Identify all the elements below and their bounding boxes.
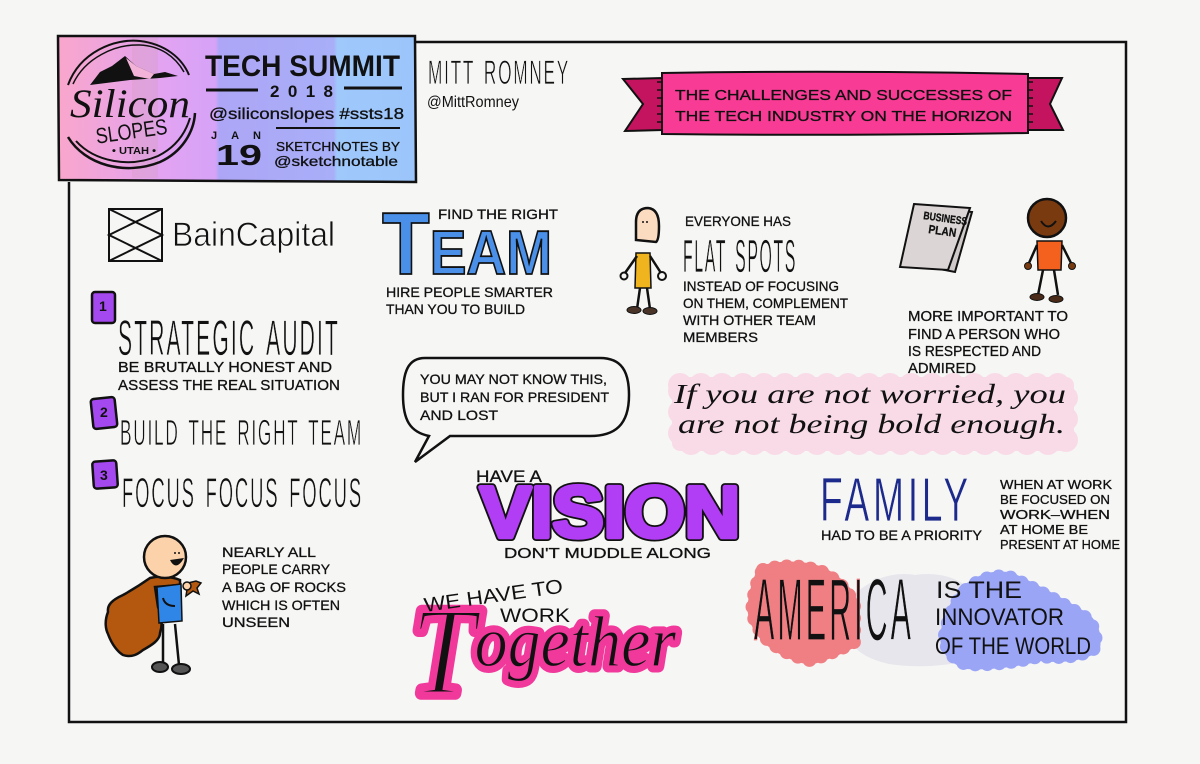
Bain Capital logo: BainCapital (172, 216, 335, 254)
vision heading: DON'T MUDDLE ALONG (504, 545, 711, 562)
logo: Silicon Slopes: SLOPES (94, 114, 169, 149)
logo: Silicon Slopes: Silicon (70, 81, 190, 126)
family heading: FAMILY (820, 466, 972, 535)
family note: WORK–WHEN (1000, 507, 1110, 522)
team heading: THAN YOU TO BUILD (386, 301, 525, 317)
family note: BE FOCUSED ON (1000, 492, 1110, 507)
banner (623, 72, 1063, 135)
banner: THE TECH INDUSTRY ON THE HORIZON (675, 108, 1012, 125)
text: FOCUS FOCUS FOCUS (122, 469, 363, 516)
team heading: TEAM (382, 194, 552, 293)
bag of rocks note: PEOPLE CARRY (222, 561, 331, 577)
team heading: FIND THE RIGHT (438, 206, 558, 222)
flat spots note: FLAT SPOTS (683, 230, 797, 282)
icon: business plan: BUSINESS (923, 210, 968, 228)
Bain Capital logo (109, 209, 335, 261)
together: T (411, 583, 481, 721)
speech bubble: AND LOST (420, 407, 498, 423)
family note: PRESENT AT HOME (1000, 537, 1120, 552)
bag of rocks note (222, 544, 346, 630)
flat spots note: ON THEM, COMPLEMENT (683, 295, 848, 311)
flat spots note: MEMBERS (683, 329, 758, 345)
quote: are not being bold enough. (678, 409, 1065, 439)
bag of rocks note: UNSEEN (222, 614, 290, 630)
date (211, 130, 262, 172)
sketchnotes credit: @sketchnotable (274, 153, 398, 169)
item 3: 3 (100, 467, 108, 483)
speaker name: @MittRomney (427, 94, 519, 111)
icon: person orange shirt (1024, 199, 1076, 302)
item 1: BE BRUTALLY HONEST AND (118, 359, 332, 376)
flat spots note: WITH OTHER TEAM (683, 312, 816, 328)
icon: person carrying bag (106, 536, 201, 674)
date: JAN (211, 130, 261, 142)
together: T (411, 583, 481, 721)
together: ogether (475, 602, 677, 682)
item 1: 1 (99, 298, 107, 314)
text: STRATEGIC AUDIT (118, 310, 340, 366)
together (411, 576, 677, 721)
sketchnotes credit: SKETCHNOTES BY (276, 139, 400, 154)
header panel (58, 36, 416, 182)
respected person note (908, 309, 1068, 377)
flat spots note: EVERYONE HAS (685, 213, 791, 229)
family heading: HAD TO BE A PRIORITY (821, 527, 983, 543)
item 2 (90, 397, 363, 453)
speech bubble (403, 358, 629, 462)
america: IS THE (936, 577, 1022, 604)
respected person note: MORE IMPORTANT TO (908, 309, 1068, 325)
date: 19 (216, 140, 262, 172)
speech bubble: YOU MAY NOT KNOW THIS, (420, 371, 607, 387)
logo: Silicon Slopes (68, 41, 195, 168)
respected person note: IS RESPECTED AND (908, 344, 1041, 360)
speech bubble: BUT I RAN FOR PRESIDENT (420, 389, 609, 405)
america: OF THE WORLD (935, 633, 1091, 660)
respected person note: ADMIRED (908, 361, 976, 377)
event year: 2018 (270, 82, 333, 101)
handles: @siliconslopes #ssts18 (209, 106, 404, 123)
quote: If you are not worried, you (673, 379, 1066, 409)
family note (1000, 477, 1120, 552)
icon: business plan (900, 204, 972, 272)
item 1: ASSESS THE REAL SITUATION (118, 377, 340, 394)
event title: TECH SUMMIT (205, 50, 400, 83)
text: BUILD THE RIGHT TEAM (120, 412, 363, 453)
family note: AT HOME BE (1000, 522, 1088, 537)
quote (673, 379, 1066, 443)
team heading: HIRE PEOPLE SMARTER (386, 284, 553, 300)
america: INNOVATOR (935, 604, 1064, 631)
vision heading: HAVE A (476, 467, 543, 486)
banner: THE CHALLENGES AND SUCCESSES OF (675, 87, 1012, 104)
logo: Silicon Slopes: • UTAH • (112, 146, 157, 157)
page frame (69, 42, 1126, 722)
bag of rocks note: NEARLY ALL (222, 544, 316, 560)
item 1 (92, 292, 340, 394)
icon: person yellow shirt (620, 208, 666, 314)
respected person note: FIND A PERSON WHO (908, 327, 1060, 343)
item 2: 2 (100, 404, 108, 420)
bag of rocks note: WHICH IS OFTEN (222, 597, 340, 613)
icon: business plan: PLAN (928, 222, 957, 240)
vision heading: VISION (480, 473, 740, 553)
family note: WHEN AT WORK (1000, 477, 1112, 492)
together: WORK (500, 606, 570, 627)
item 3 (92, 460, 363, 516)
sketchnotes credit (274, 139, 400, 169)
flat spots note: INSTEAD OF FOCUSING (683, 278, 839, 294)
vision heading: VISION (480, 473, 740, 553)
together: ogether (475, 602, 677, 682)
family heading (820, 466, 983, 543)
flat spots note (683, 213, 848, 345)
bag of rocks note: A BAG OF ROCKS (222, 579, 346, 595)
together: WE HAVE TO (423, 576, 564, 617)
speaker name (427, 54, 570, 111)
numbered list (90, 292, 363, 516)
speaker name: MITT ROMNEY (428, 54, 570, 92)
